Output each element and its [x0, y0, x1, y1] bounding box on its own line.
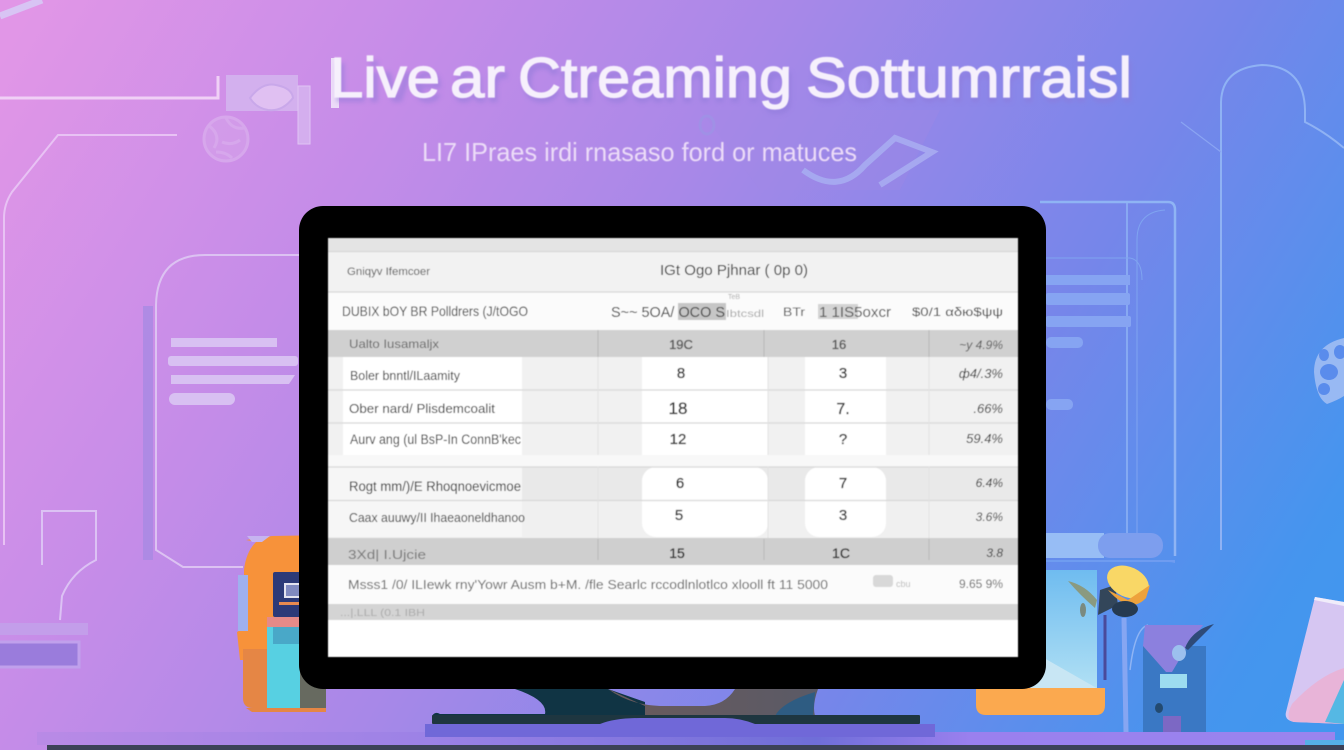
- table row: users: ~y 4.9%: [959, 338, 1003, 352]
- table row: bandwidth: 8: [677, 365, 685, 382]
- table row: subtotal: 3.8: [986, 546, 1003, 560]
- text placeholder lines: [1046, 275, 1131, 410]
- icon: funnel outline: [42, 511, 96, 620]
- table row: region: Rogt mm/)/E Rhoqnoevicmoe: [349, 479, 521, 494]
- table row: region: [349, 475, 1003, 494]
- icon: globe right: [1314, 338, 1344, 404]
- table row: connection: 59.4%: [966, 431, 1003, 446]
- table row: bandwidth: Boler bnntl/ILaamity: [350, 368, 460, 383]
- table subheader row: S~~ 5OA/ OCO S: [611, 304, 725, 321]
- table row: footer: ...|.LLL (0.1 IBH: [340, 608, 425, 619]
- table row: platform: Ober nard/ Plisdemcoalit: [349, 401, 495, 416]
- table row: subtotal: 1C: [832, 545, 850, 561]
- title shadow: Live: [333, 51, 443, 115]
- table row: users: Ualto Iusamaljx: [349, 337, 439, 351]
- data table screen: [328, 238, 1018, 657]
- table row: connection: Aurv ang (ul BsP-In ConnB'kec: [350, 432, 521, 447]
- tall curved line: [1221, 65, 1344, 550]
- table row: case: Caax auuwy/II Ihaeaoneldhanoo: [349, 510, 525, 525]
- monitor bezel: [299, 206, 1046, 689]
- outline: rounded window: [156, 255, 300, 567]
- text placeholder lines: [168, 338, 298, 405]
- table header row: [347, 262, 808, 279]
- outline: large panel: [4, 135, 177, 545]
- title shadow: [333, 51, 1135, 115]
- table row: note: 9.65 9%: [959, 577, 1003, 591]
- title words: ar: [450, 46, 505, 110]
- table row: case: 3: [839, 507, 847, 524]
- table row: platform: 18: [669, 399, 687, 418]
- table subheader row: Ibtcsdl: [726, 309, 764, 320]
- table subheader row: DUBIX bOY BR Polldrers (J/tOGO: [342, 303, 528, 319]
- table row: users: [349, 337, 1003, 352]
- icon: glass with water: [976, 560, 1175, 715]
- table row: bandwidth: [350, 365, 1003, 383]
- table row: subtotal: [348, 545, 1003, 562]
- table row: platform: [349, 399, 1003, 418]
- table row: platform: 7.: [836, 401, 850, 418]
- subtitle: LI7 IPraes irdi rnasaso ford or matuces: [422, 137, 857, 167]
- title shadow: Sottumrraisl: [809, 51, 1135, 115]
- table row: bandwidth: 3: [839, 365, 847, 382]
- monitor stand: [425, 689, 935, 737]
- table row: note: [348, 575, 1003, 592]
- title words: Live: [330, 46, 440, 110]
- table row: region: 6: [676, 475, 684, 492]
- table row: subtotal: 15: [669, 545, 685, 561]
- title words: [330, 46, 1132, 110]
- table row: note: cbu: [896, 579, 911, 589]
- panel: cup decoration behind subtitle: [700, 110, 940, 190]
- bottom pill: [1046, 533, 1163, 558]
- panel: right background decoration: [1040, 65, 1344, 558]
- table row: case: [349, 507, 1003, 525]
- table subheader row: [342, 294, 1003, 321]
- shelf: [0, 623, 88, 635]
- table row: region: 6.4%: [976, 476, 1003, 490]
- row rules: [328, 252, 1018, 500]
- table row: subtotal: 3Xd| I.Ujcie: [348, 547, 426, 562]
- icon: globe: [204, 117, 248, 161]
- table header row: Gniqyv Ifemcoer: [347, 266, 430, 278]
- icon: blender: [1124, 618, 1214, 732]
- table row: connection: [350, 431, 1003, 448]
- table row: users: 16: [832, 337, 846, 352]
- floor: [37, 732, 1344, 750]
- table subheader row: $0/1 αδю$ψψ: [912, 305, 1003, 319]
- table subheader row: 1 1IS5oxcr: [819, 304, 891, 321]
- table row: note: Msss1 /0/ ILIewk rny'Yowr Ausm b+M. /fle Searlc rccodlnlotlco xlooll ft 11 5000: [348, 577, 828, 592]
- table row: case: 5: [675, 507, 683, 524]
- table row: platform: .66%: [973, 401, 1003, 416]
- column rules: [598, 330, 929, 560]
- title words: Ctreaming: [518, 46, 792, 110]
- table row: region: 7: [839, 475, 847, 492]
- title shadow: ar: [453, 51, 508, 115]
- title words: Sottumrraisl: [806, 46, 1132, 110]
- title shadow: Ctreaming: [521, 51, 795, 115]
- circuit line: [0, 76, 218, 98]
- table row: case: 3.6%: [976, 510, 1003, 524]
- table row: connection: ?: [839, 431, 847, 448]
- icon: flower: [1068, 559, 1154, 680]
- table row: bandwidth: ф4/.3%: [959, 366, 1003, 381]
- table row: connection: 12: [670, 431, 686, 448]
- white cell patches: [343, 357, 522, 455]
- icon: swoosh: [803, 138, 932, 185]
- panel: left background decoration: [0, 0, 339, 667]
- monitor: [299, 206, 1046, 689]
- window outline: [1040, 202, 1175, 556]
- icon: tablet: [1286, 597, 1344, 724]
- table row: users: 19C: [669, 337, 693, 352]
- corner stroke: [0, 0, 42, 16]
- icon: orange device: [237, 535, 330, 712]
- tray: [0, 642, 79, 667]
- table subheader row: BTr: [783, 305, 805, 319]
- icon: eye panel: [226, 58, 339, 144]
- table header row: IGt Ogo Pjhnar ( 0p 0): [660, 262, 808, 279]
- title: [330, 46, 1135, 115]
- table subheader row: TeB: [728, 294, 740, 301]
- side bar: [143, 306, 153, 560]
